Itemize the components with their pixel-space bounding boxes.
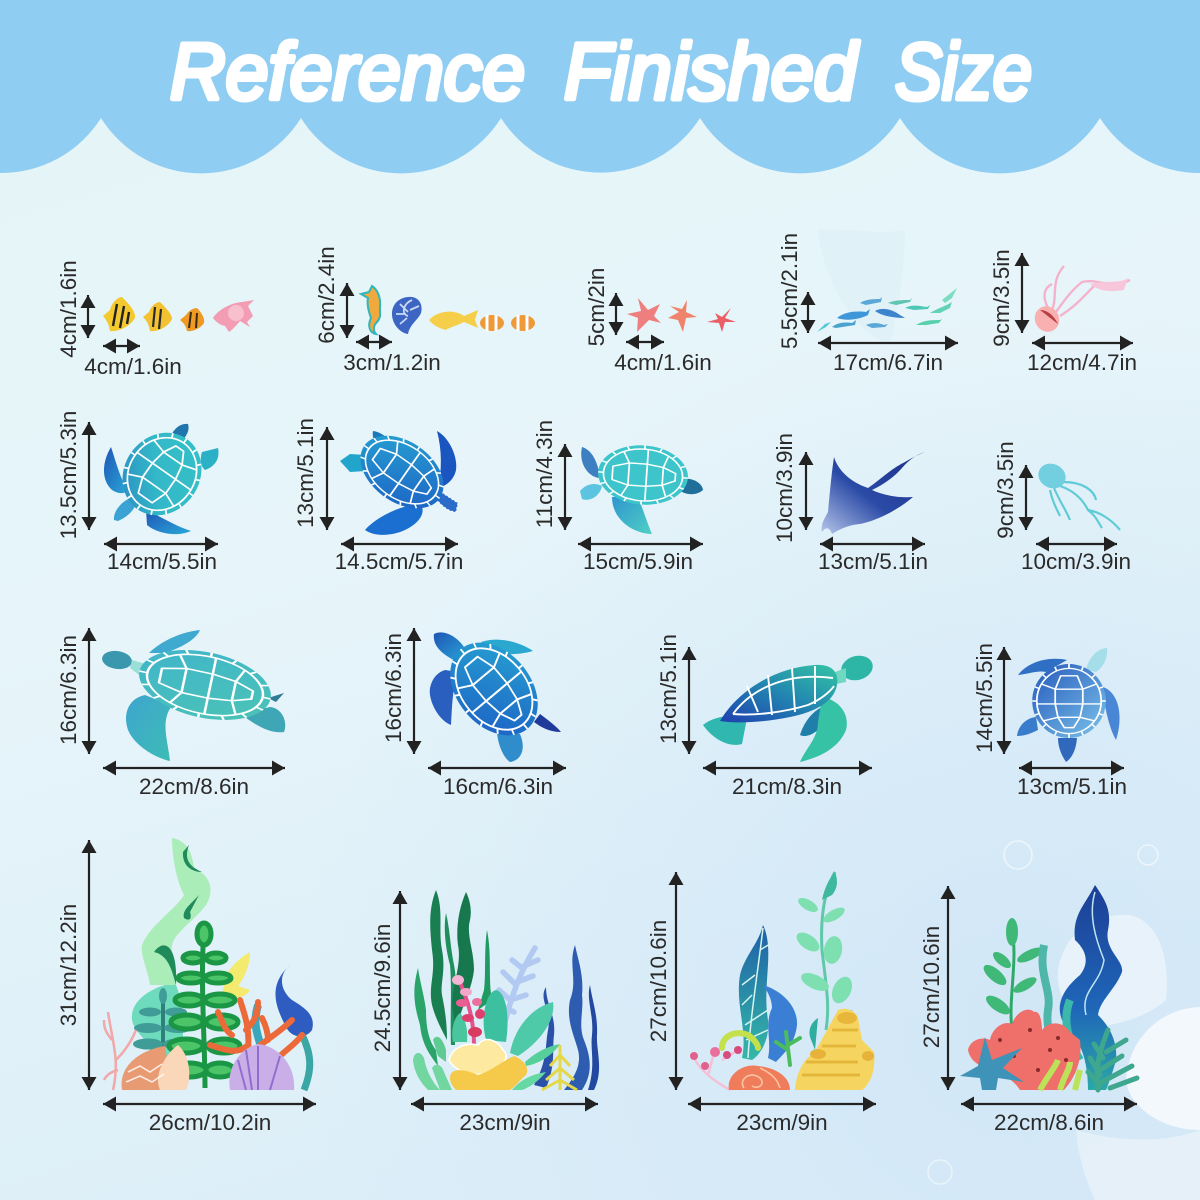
- illustration: pink stems: [452, 975, 485, 1045]
- item: seahorse, shell and fish set: 6cm/2.4in: [314, 246, 339, 344]
- illustration: pink bead branches: [690, 1046, 742, 1090]
- item: round blue turtle: [972, 643, 1127, 799]
- item: seaweed scene 4: 27cm/10.6in: [919, 926, 944, 1048]
- item: large blue turtle: 16cm/6.3in: [381, 633, 406, 743]
- icon: turtle 7: [703, 652, 876, 762]
- illustration: green cactus leaves: [452, 990, 560, 1090]
- item: teal turtle side: 11cm/4.3in: [532, 420, 557, 528]
- item: tropical fish set: 4cm/1.6in: [84, 354, 182, 379]
- item: seaweed scene 1: 26cm/10.2in: [149, 1110, 271, 1135]
- icon: pink jellyfish: [1030, 266, 1130, 336]
- item: seaweed scene 2: [370, 890, 599, 1135]
- item: teal turtle small: 14cm/5.5in: [107, 549, 217, 574]
- title: Size: [895, 27, 1032, 116]
- item: manta ray: 10cm/3.9in: [772, 433, 797, 543]
- icon: seahorse: [361, 286, 380, 334]
- illustration: blue starfish: [960, 1037, 1024, 1090]
- icon: manta ray: [822, 452, 925, 534]
- illustration: pink branches: [104, 1012, 136, 1090]
- item: tropical fish set: 4cm/1.6in: [56, 260, 81, 358]
- item: teal turtle small: [56, 411, 218, 574]
- item: large teal turtle: 22cm/8.6in: [139, 774, 249, 799]
- item: teal jellyfish: 10cm/3.9in: [1021, 549, 1131, 574]
- item: manta ray: [772, 433, 928, 574]
- illustration: green branching leaves: [980, 918, 1045, 1030]
- icon: turtle 8: [1017, 648, 1120, 762]
- icon: turtle 2: [340, 421, 458, 535]
- illustration: blue feather leaf: [763, 985, 797, 1062]
- illustration: teal feather leaf: [739, 925, 770, 1060]
- item: seaweed scene 3: 23cm/9in: [736, 1110, 828, 1135]
- illustration: teal ribbon: [1042, 945, 1052, 1045]
- item: school of fish: [777, 233, 958, 375]
- item: seaweed scene 2: 24.5cm/9.6in: [370, 924, 395, 1052]
- item: pink jellyfish: 9cm/3.5in: [989, 249, 1014, 347]
- item: teal turtle side: 15cm/5.9in: [583, 549, 693, 574]
- illustration: yellow leaf: [222, 952, 250, 997]
- illustration: lime leaves: [722, 1032, 800, 1065]
- illustration: yellow coral: [449, 1040, 527, 1090]
- item: round blue turtle: 13cm/5.1in: [1017, 774, 1127, 799]
- icon: turtle 1: [104, 417, 218, 534]
- item: starfish set: 5cm/2in: [584, 268, 609, 346]
- illustration: blue ribbon weed: [255, 965, 313, 1090]
- item: green-blue turtle: 21cm/8.3in: [732, 774, 842, 799]
- item: manta ray: 13cm/5.1in: [818, 549, 928, 574]
- icon: fish school: [817, 288, 957, 332]
- item: large blue turtle: 16cm/6.3in: [443, 774, 553, 799]
- item: green-blue turtle: 13cm/5.1in: [656, 634, 681, 744]
- item: school of fish: 5.5cm/2.1in: [777, 233, 802, 349]
- icon: turtle 6: [430, 626, 561, 762]
- turtle 7 domed shell: [720, 665, 837, 722]
- illustration: dark teal fern: [133, 988, 193, 1062]
- item: pink jellyfish: 12cm/4.7in: [1027, 350, 1137, 375]
- item: blue turtle small: 14.5cm/5.7in: [335, 549, 463, 574]
- item: seaweed scene 3: [646, 872, 876, 1135]
- item: seaweed scene 1: [56, 838, 316, 1135]
- wavy header banner: [0, 0, 1200, 173]
- title: Finished: [564, 27, 859, 116]
- illustration: orange spiral shell: [729, 1066, 790, 1090]
- item: teal turtle side: [532, 420, 703, 574]
- icon: clownfish pair: [480, 315, 535, 331]
- icon: teal jellyfish: [1034, 459, 1120, 530]
- title: Reference: [170, 27, 525, 116]
- item: large teal turtle: 16cm/6.3in: [56, 635, 81, 745]
- illustration: yellow tube sponges: [795, 1009, 874, 1090]
- item: school of fish: 17cm/6.7in: [833, 350, 943, 375]
- illustration: green fern: [169, 923, 240, 1088]
- item: teal turtle small: 13.5cm/5.3in: [56, 411, 81, 539]
- illustration: red coral: [968, 1010, 1080, 1090]
- illustration: purple scallop shell: [229, 1044, 294, 1090]
- icon: tropical fish: [103, 297, 254, 332]
- illustration: ribbon kelp: [132, 838, 210, 1062]
- illustration: light green vine: [793, 872, 856, 1050]
- illustration: green blades: [413, 890, 492, 1090]
- item: green-blue turtle: [656, 634, 876, 799]
- item: blue turtle small: 13cm/5.1in: [293, 418, 318, 528]
- background seashell illustration: [1058, 915, 1200, 1200]
- item: large blue turtle: [381, 626, 566, 799]
- illustration: conch shell: [122, 1045, 189, 1090]
- item: tropical fish set: [56, 260, 254, 379]
- item: teal jellyfish: [993, 441, 1131, 574]
- illustration: pale blue fern: [499, 948, 538, 1022]
- illustration: lime grass: [1040, 1060, 1080, 1090]
- item: seaweed scene 4: 22cm/8.6in: [994, 1110, 1104, 1135]
- icon: blue spiral shell: [392, 297, 422, 334]
- item: seaweed scene 1: 31cm/12.2in: [56, 904, 81, 1026]
- item: seahorse, shell and fish set: [314, 246, 535, 375]
- illustration: blue blades: [534, 945, 599, 1090]
- icon: turtle 5: [101, 630, 285, 761]
- icon: starfish: [627, 298, 736, 332]
- item: pink jellyfish: [989, 249, 1137, 375]
- illustration: green fern right: [1088, 1030, 1137, 1090]
- item: blue turtle small: [293, 418, 463, 574]
- item: teal jellyfish: 9cm/3.5in: [993, 441, 1018, 539]
- icon: yellow fish: [429, 310, 478, 330]
- illustration: orange coral: [210, 1000, 302, 1060]
- item: starfish set: [584, 268, 736, 375]
- title: [170, 27, 1032, 116]
- item: seaweed scene 4: [919, 885, 1137, 1135]
- item: starfish set: 4cm/1.6in: [614, 350, 712, 375]
- illustration: yellow fern: [542, 1045, 577, 1090]
- icon: turtle 3: [580, 442, 703, 534]
- item: seaweed scene 2: 23cm/9in: [459, 1110, 551, 1135]
- item: large teal turtle: [56, 628, 285, 799]
- illustration: navy ribbon kelp: [1060, 885, 1122, 1090]
- item: seahorse, shell and fish set: 3cm/1.2in: [343, 350, 441, 375]
- item: seaweed scene 3: 27cm/10.6in: [646, 920, 671, 1042]
- item: round blue turtle: 14cm/5.5in: [972, 643, 997, 753]
